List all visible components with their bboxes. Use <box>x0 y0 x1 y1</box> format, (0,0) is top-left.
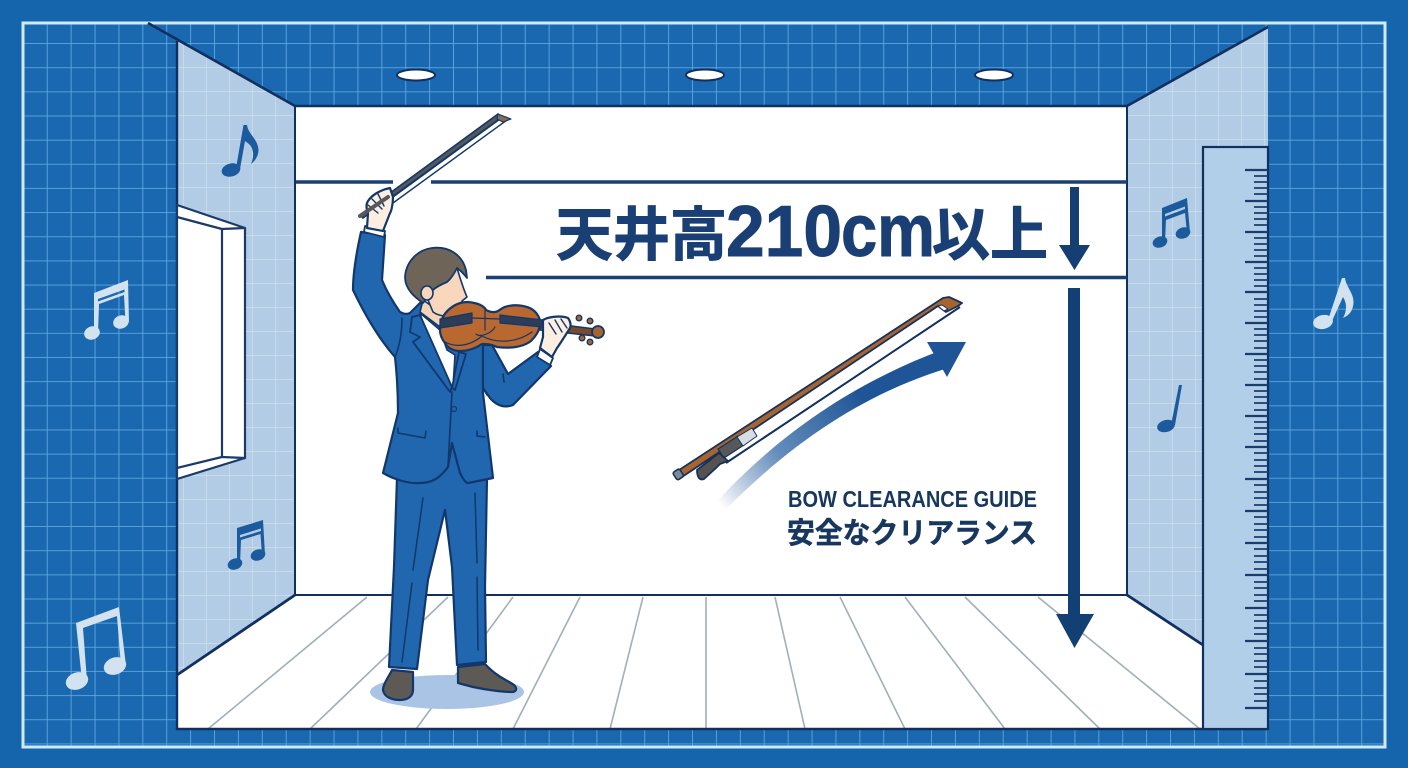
jacket button <box>452 406 456 412</box>
bow clearance arrow <box>718 342 966 510</box>
note: right margin eighth <box>1312 278 1354 331</box>
face <box>428 268 467 316</box>
ruler long ticks <box>1245 170 1268 708</box>
short height arrow <box>1059 187 1090 270</box>
caption japanese: 安全なクリアランス <box>787 517 1037 550</box>
shoes <box>383 664 516 700</box>
violin hand <box>540 317 571 357</box>
music notes <box>63 125 1354 693</box>
note: right wall quarter <box>1156 385 1182 434</box>
violin bow illustration <box>672 297 962 480</box>
floor boards <box>208 597 1200 729</box>
bow hair <box>726 307 960 463</box>
hair <box>405 248 467 303</box>
bow frog <box>697 453 728 479</box>
bow in raised hand <box>360 114 511 218</box>
floor shadow <box>370 675 524 709</box>
bow button <box>672 468 684 480</box>
left wall <box>177 41 295 675</box>
raised cuff <box>364 226 385 237</box>
bow stick <box>676 297 962 479</box>
shirt <box>420 313 455 387</box>
ruler <box>1203 147 1268 729</box>
top height line <box>296 180 1127 184</box>
violin fittings <box>440 313 472 328</box>
bow wrap <box>718 436 744 458</box>
title: cm <box>841 189 935 272</box>
jacket details <box>395 318 504 467</box>
caption <box>787 486 1037 550</box>
jacket <box>353 232 551 483</box>
violin cuff <box>537 349 553 365</box>
right sleeve <box>483 345 551 406</box>
neck <box>420 300 446 327</box>
lapels <box>410 315 466 392</box>
arrow head <box>927 342 966 377</box>
raised hand <box>360 188 393 231</box>
bow tip cut-out <box>938 305 948 311</box>
ear <box>421 286 433 300</box>
violinist <box>353 114 604 709</box>
room <box>148 23 1268 729</box>
note: right wall beamed <box>1151 198 1192 250</box>
title <box>556 188 1048 272</box>
long height arrow <box>1056 288 1094 648</box>
title: 天井高 <box>556 188 727 272</box>
ruler short ticks <box>1254 176 1268 701</box>
trousers <box>389 440 487 669</box>
bow silver <box>737 428 757 446</box>
note: left wall eighth <box>220 125 258 179</box>
room outlines <box>148 23 1268 729</box>
title: 以上 <box>932 188 1048 272</box>
note: left margin beamed <box>82 280 131 342</box>
title: 210 <box>726 192 842 272</box>
note: left wall beamed <box>226 520 267 572</box>
window on left wall <box>177 205 245 479</box>
violin <box>440 302 604 351</box>
right wall <box>1127 27 1268 729</box>
ceiling lights <box>397 70 1013 80</box>
floor <box>177 595 1203 729</box>
caption english: BOW CLEARANCE GUIDE <box>788 486 1037 512</box>
back wall <box>295 106 1127 595</box>
note: left margin large beamed <box>63 607 129 693</box>
lower height line <box>486 276 1127 279</box>
